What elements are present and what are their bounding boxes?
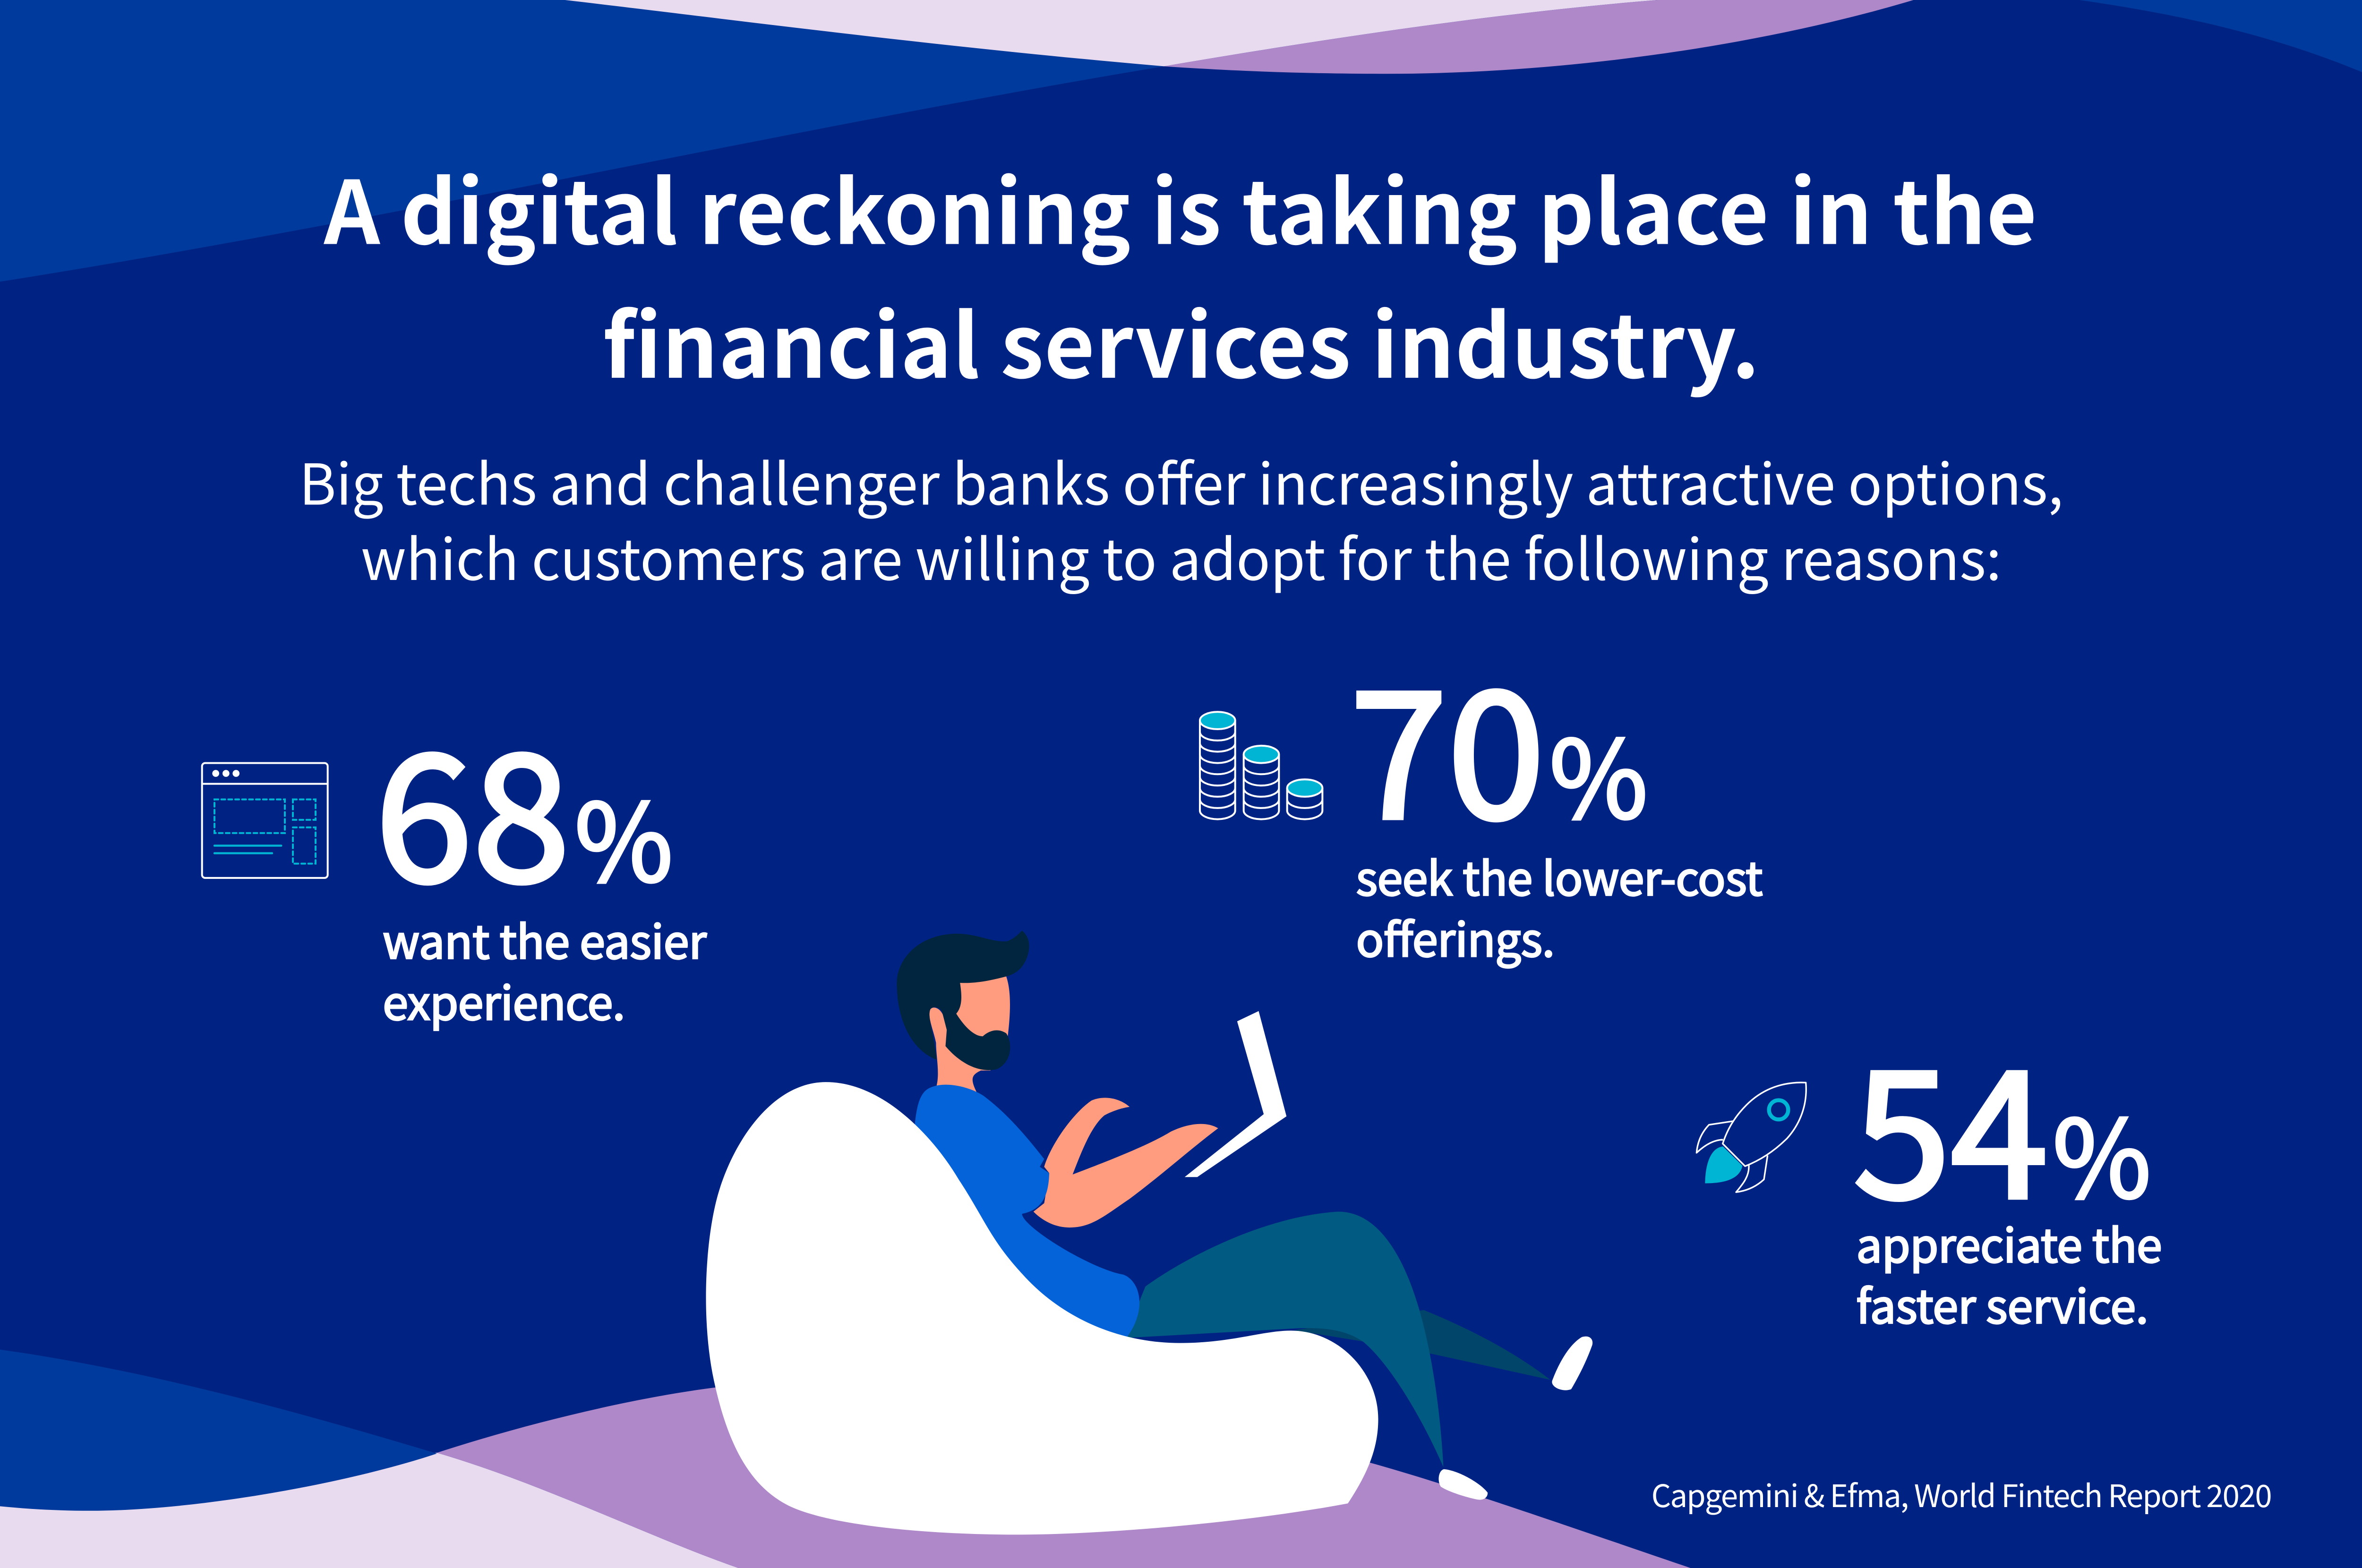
- bottom wave: purple: [437, 1387, 1691, 1568]
- bottom wave: blue: [0, 1350, 437, 1511]
- icon: coin stacks: [1200, 712, 1322, 819]
- title: financial services industry.: [603, 277, 1760, 403]
- number: 68%: [375, 678, 673, 932]
- caption: [1356, 843, 1763, 970]
- hair and beard: [897, 930, 1029, 1070]
- subtitle: which customers are willing to adopt for the following reasons:: [361, 515, 2002, 597]
- head and neck skin: [929, 976, 1010, 1092]
- title: [324, 143, 2037, 403]
- number: 70%: [1350, 615, 1648, 869]
- top wave: blue right: [2079, 0, 2362, 72]
- top wave: purple: [1164, 0, 1914, 74]
- icon: rocket: [1696, 1082, 1806, 1192]
- laptop: [1185, 1011, 1286, 1177]
- source note: Capgemini & Efma, World Fintech Report 2020: [1652, 1471, 2272, 1516]
- caption: want the easier: [383, 906, 707, 972]
- caption: faster service.: [1856, 1270, 2148, 1337]
- stat: 54 percent: [1696, 994, 2162, 1337]
- top wave: blue left: [0, 0, 1657, 281]
- subtitle: [299, 439, 2063, 597]
- stat: 68 percent: [202, 678, 707, 1033]
- subtitle: Big techs and challenger banks offer increasingly attractive options,: [299, 439, 2063, 521]
- far leg: [1294, 1310, 1550, 1380]
- illustration: man on beanbag with laptop: [706, 930, 1592, 1534]
- stat: 70 percent: [1200, 615, 1763, 970]
- title: A digital reckoning is taking place in the: [324, 143, 2037, 270]
- back shoe: [1552, 1337, 1592, 1390]
- bean bag: [706, 1082, 1378, 1534]
- front shoe: [1438, 1469, 1488, 1500]
- arms: [1034, 1098, 1218, 1227]
- bottom wave: lilac: [0, 1453, 738, 1568]
- shirt: [915, 1085, 1139, 1338]
- caption: appreciate the: [1856, 1210, 2162, 1276]
- icon: browser window: [202, 763, 328, 878]
- caption: [1856, 1210, 2162, 1337]
- top wave: lilac: [565, 0, 1657, 66]
- number: 54%: [1853, 994, 2151, 1248]
- caption: seek the lower-cost: [1356, 843, 1763, 909]
- near leg: [1126, 1212, 1443, 1467]
- caption: offerings.: [1356, 903, 1555, 970]
- caption: experience.: [383, 967, 625, 1033]
- caption: [383, 906, 707, 1033]
